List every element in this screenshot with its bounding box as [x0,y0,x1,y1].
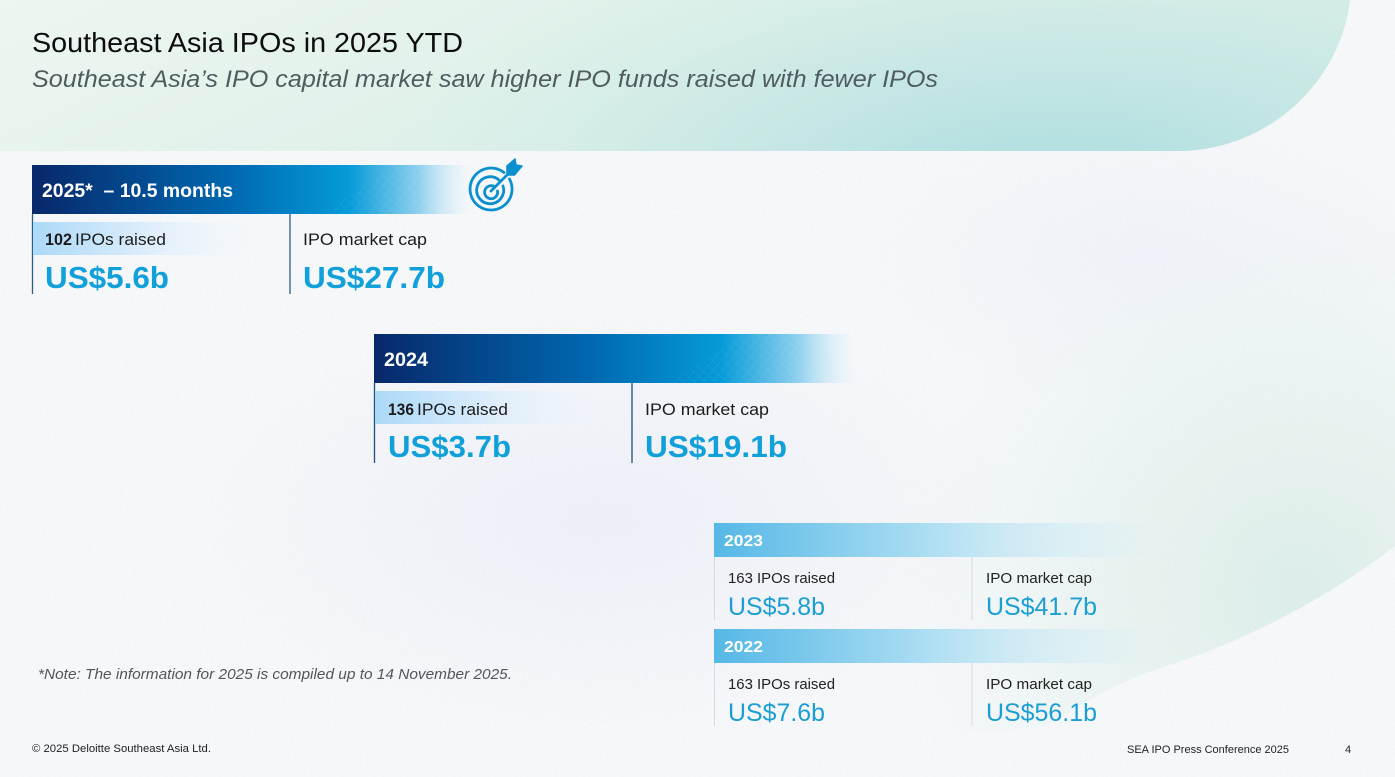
metric: IPOs raised: 163 IPOs raised [728,677,835,693]
panel: 2024 [374,334,856,464]
2022 header bar: 2022 [724,639,763,656]
icon: target with arrow [470,159,522,210]
metric: IPO market cap: IPO market cap [986,571,1092,587]
title: Southeast Asia IPOs in 2025 YTD [32,27,463,58]
metric: IPOs raised: US$7.6b [728,699,825,727]
2024 header bar: 2024 [384,350,428,371]
metric: IPOs raised: US$5.8b [728,593,825,621]
metric: IPO market cap: IPO market cap [645,400,769,419]
metric: IPO market cap: US$19.1b [645,429,787,464]
column dividers [374,383,632,463]
panel: 2022 [714,629,1170,727]
metric: IPO market cap: IPO market cap [303,230,427,249]
metric: IPOs raised: 102 [45,230,72,249]
footnote: *Note: The information for 2025 is compiled up to 14 November 2025. [38,667,512,683]
column dividers [32,214,290,294]
footer: copyright: © 2025 Deloitte Southeast Asia Ltd. [32,743,211,755]
header band [0,0,1350,151]
2023 header bar [714,523,1170,557]
2023 header bar: 2023 [724,533,763,550]
2025 header bar: 2025* – 10.5 months [42,181,233,202]
metric: IPO market cap: US$56.1b [986,699,1097,727]
metric: IPOs raised: IPOs raised [417,400,508,419]
metric: IPOs raised [728,571,835,621]
metric: IPOs raised [33,222,255,295]
metric: IPO market cap: IPO market cap [986,677,1092,693]
metric: IPO market cap: US$27.7b [303,260,445,295]
subtitle: Southeast Asia’s IPO capital market saw higher IPO funds raised with fewer IPOs [32,66,938,93]
metric: IPO market cap [303,230,445,295]
metric: IPOs raised: US$3.7b [388,429,511,464]
metric: IPOs raised [728,677,835,727]
metric: IPO market cap: US$41.7b [986,593,1097,621]
panel: 2023 [714,523,1170,621]
footer: page number: 4 [1345,744,1351,756]
metric: IPO market cap [645,400,787,464]
panel: 2025 [32,159,522,295]
metric: IPO market cap [986,571,1097,621]
metric: IPO market cap [986,677,1097,727]
metric: IPOs raised: 136 [388,400,414,419]
metric: IPOs raised: IPOs raised [75,230,166,249]
metric: IPOs raised: US$5.6b [45,260,169,295]
2024 header bar [374,334,856,383]
2022 header bar [714,629,1170,663]
footer: event name: SEA IPO Press Conference 2025 [1127,744,1289,756]
metric: IPOs raised [375,391,605,464]
column dividers [714,557,972,620]
2025 header bar [32,165,472,214]
column dividers [714,663,972,726]
metric: IPOs raised: 163 IPOs raised [728,571,835,587]
